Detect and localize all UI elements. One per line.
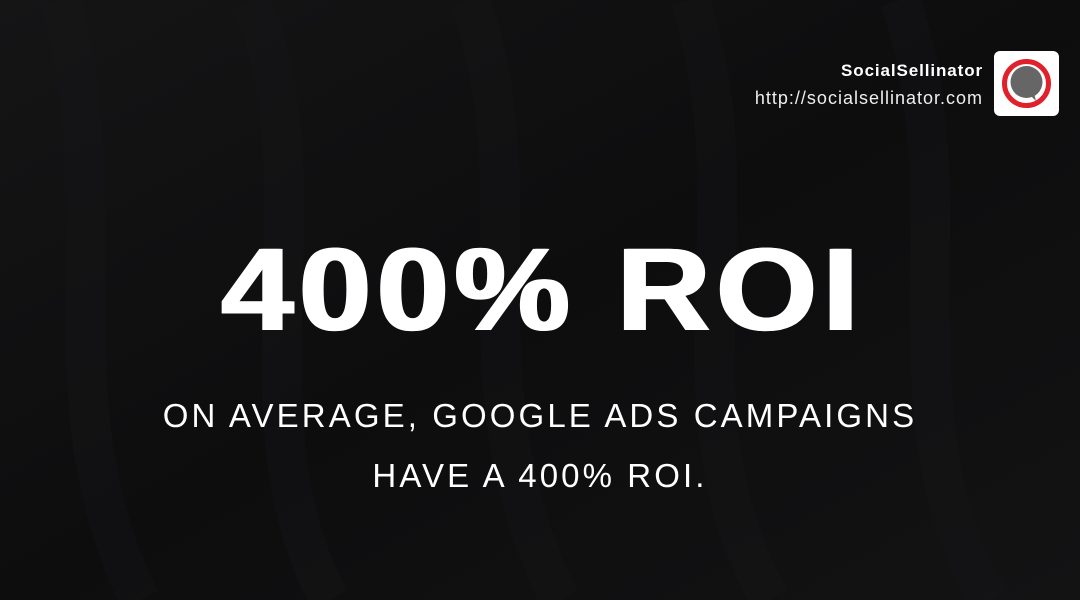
brand text: SocialSellinator	[841, 61, 983, 80]
icon: logo	[994, 51, 1059, 116]
subtitle text: ON AVERAGE, GOOGLE ADS CAMPAIGNS	[163, 397, 917, 434]
brand text	[755, 61, 983, 108]
brand text: http://socialsellinator.com	[755, 88, 983, 108]
subtitle text: HAVE A 400% ROI.	[372, 457, 708, 494]
title: 400% ROI	[221, 224, 864, 356]
subtitle text	[163, 397, 917, 494]
